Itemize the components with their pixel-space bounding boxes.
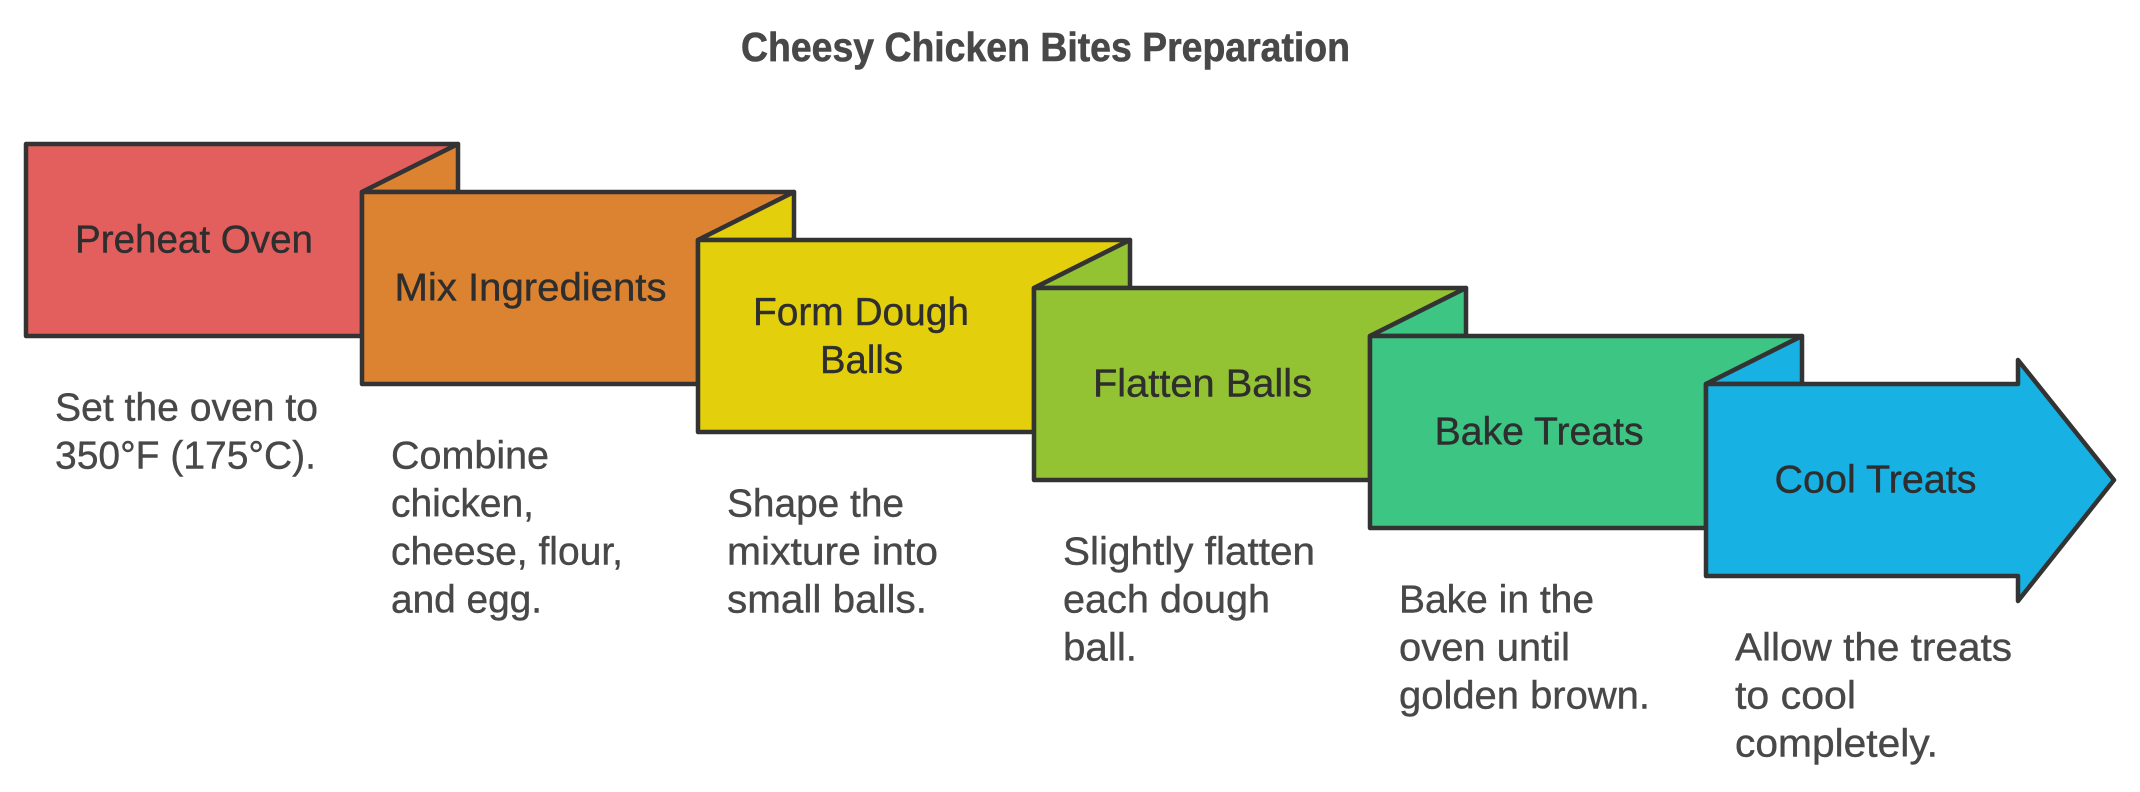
step 3: Form Dough Balls: Form Dough <box>753 291 969 334</box>
step 2: Mix Ingredients: Mix Ingredients <box>394 267 666 310</box>
step 5: Bake Treats <box>1370 288 1802 528</box>
description: Preheat Oven: 350°F (175°C). <box>55 434 316 478</box>
description: Mix Ingredients: and egg. <box>391 578 542 622</box>
description: Form Dough Balls <box>727 482 938 622</box>
step 4: Flatten Balls <box>1034 240 1466 480</box>
step 3: Form Dough Balls: Balls <box>820 339 903 382</box>
description: Mix Ingredients: Combine <box>391 434 549 478</box>
description: Cool Treats: completely. <box>1735 722 1938 766</box>
description: Bake Treats: Bake in the <box>1399 578 1594 622</box>
description: Cool Treats: Allow the treats <box>1735 626 2012 670</box>
description: Preheat Oven: Set the oven to <box>55 386 318 430</box>
description: Flatten Balls: each dough <box>1063 578 1270 622</box>
step 2: Mix Ingredients <box>362 144 794 384</box>
description: Bake Treats <box>1399 578 1650 718</box>
step 3: Form Dough Balls <box>698 192 1130 432</box>
step 6: Cool Treats arrow <box>1706 336 2114 601</box>
description: Form Dough Balls: Shape the <box>727 482 904 526</box>
description: Flatten Balls: Slightly flatten <box>1063 530 1315 574</box>
description: Cool Treats: to cool <box>1735 674 1856 718</box>
description: Form Dough Balls: small balls. <box>727 578 927 622</box>
step 5: Bake Treats: Bake Treats <box>1435 411 1644 454</box>
description: Flatten Balls: ball. <box>1063 626 1137 670</box>
description: Flatten Balls <box>1063 530 1315 670</box>
description: Bake Treats: golden brown. <box>1399 674 1650 718</box>
description: Mix Ingredients: chicken, <box>391 482 534 526</box>
description: Form Dough Balls: mixture into <box>727 530 938 574</box>
step 1: Preheat Oven: Preheat Oven <box>75 219 313 262</box>
step 4: Flatten Balls: Flatten Balls <box>1093 363 1312 406</box>
description: Mix Ingredients <box>391 434 623 622</box>
step 1: Preheat Oven <box>26 144 458 336</box>
description: Bake Treats: oven until <box>1399 626 1570 670</box>
step 6: Cool Treats arrow: Cool Treats <box>1774 459 1976 502</box>
title: Cheesy Chicken Bites Preparation <box>741 24 1350 70</box>
description: Cool Treats <box>1735 626 2012 766</box>
description: Mix Ingredients: cheese, flour, <box>391 530 623 574</box>
description: Preheat Oven <box>55 386 318 478</box>
